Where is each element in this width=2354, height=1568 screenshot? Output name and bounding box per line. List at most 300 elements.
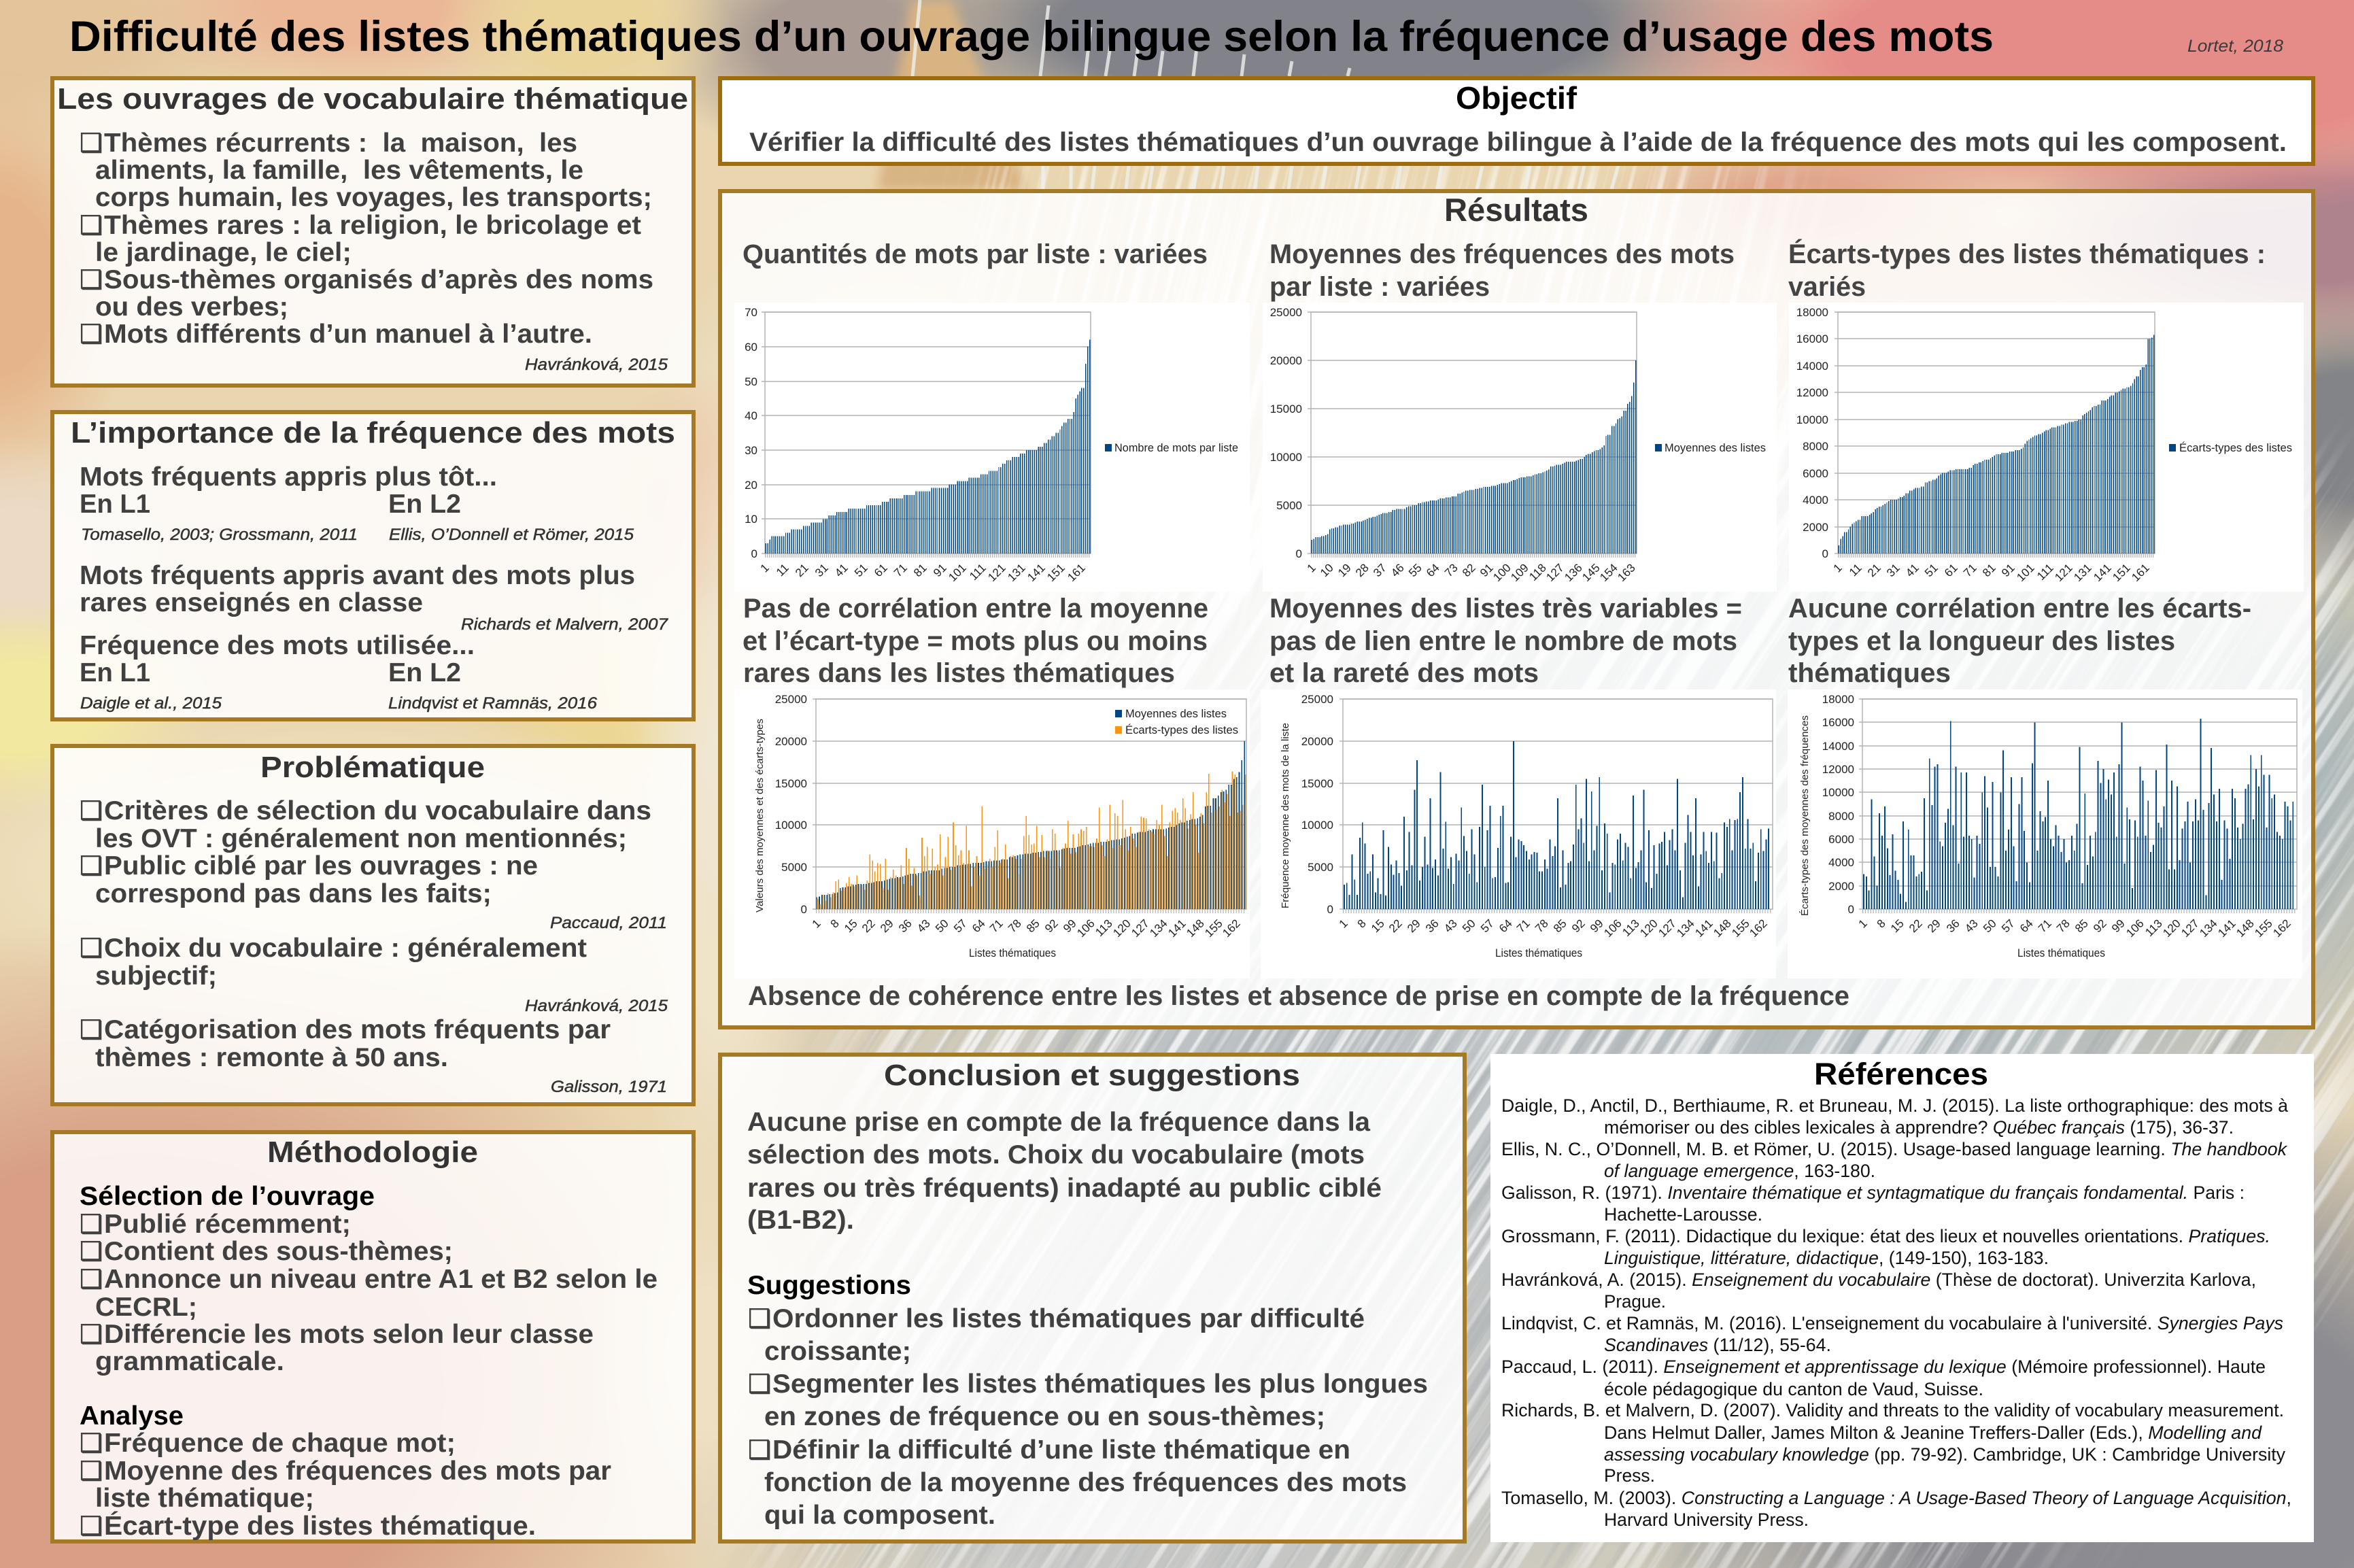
reference list: mémoriser ou des cibles lexicales à apprendre? Québec français (175), 36-37.: [1604, 1117, 2234, 1138]
bar chart: fréquence moyenne par liste: 43: [1442, 917, 1460, 935]
reference list: Harvard University Press.: [1604, 1510, 1809, 1530]
bar chart: écarts-types des moyennes: 8000: [1828, 810, 1854, 823]
bar chart: moyennes et écarts-types combinés: [734, 689, 1250, 978]
chart 3 heading: [1788, 239, 2266, 302]
legend: Moyennes des listes: [1125, 707, 1227, 720]
bar chart: écarts-types des moyennes: 50: [1981, 917, 1999, 935]
chart 6 heading: types et la longueur des listes: [1788, 626, 2175, 656]
text block: sélection de l'ouvrage: [80, 1182, 658, 1376]
bar chart: écarts-types des listes: 151: [2110, 561, 2133, 584]
bar chart: écarts-types des listes: 8000: [1803, 440, 1828, 453]
bar chart: moyennes des listes: 25000: [1270, 306, 1302, 319]
bar chart: moyennes des listes: 19: [1335, 561, 1354, 579]
text block: learned earlier: Tomasello, 2003; Grossmann, 2011: [81, 526, 358, 544]
bar chart: fréquence moyenne par liste: 64: [1497, 917, 1515, 935]
bar chart: écarts-types des moyennes: 8: [1875, 917, 1888, 931]
bullet list: Catégorisation des mots fréquents par: [104, 1015, 611, 1044]
title: Difficulté des listes thématiques d’un ouvrage bilingue selon la fréquence d’usage des mots: [69, 13, 1994, 61]
text block: learned before rarer words: rares enseignés en classe: [80, 588, 423, 617]
bar chart: écarts-types des moyennes: 14000: [1822, 740, 1854, 753]
bar chart: écarts-types des moyennes: 36: [1944, 917, 1962, 935]
bar chart: fréquence moyenne par liste: 15000: [1301, 777, 1333, 790]
bar chart: nombre de mots par liste: 0: [751, 547, 757, 560]
suggestions list: Définir la difficulté d’une liste thématique en: [772, 1435, 1350, 1465]
bar chart: écarts-types des moyennes: 4000: [1828, 856, 1854, 869]
bar chart: moyennes des listes: 82: [1460, 561, 1478, 579]
bar chart: moyennes des listes: 127: [1543, 561, 1567, 584]
text block: frequency used: En L2: [388, 658, 461, 687]
heading: Les ouvrages de vocabulaire thématique: [57, 82, 688, 116]
bar chart: moyennes des listes: 37: [1371, 561, 1389, 579]
bar chart: écarts-types des listes: [1789, 303, 2304, 592]
conclusion text: Aucune prise en compte de la fréquence dans la: [747, 1108, 1370, 1137]
bullet list: subjectif;: [95, 961, 217, 991]
bullet list: corps humain, les voyages, les transports;: [95, 183, 652, 212]
text block: analyse: Écart-type des listes thématique.: [104, 1511, 536, 1541]
text block: sélection de l'ouvrage: ❑: [80, 1319, 103, 1349]
legend: Écarts-types des listes: [2179, 441, 2292, 454]
chart 2 heading: [1269, 239, 1735, 302]
chart 6 heading: [1788, 594, 2251, 688]
text block: learned earlier: Ellis, O’Donnell et Römer, 2015: [389, 526, 634, 544]
suggestions list: ❑: [748, 1435, 771, 1465]
text block: learned earlier: Mots fréquents appris plus tôt...: [80, 462, 497, 492]
bar chart: moyennes des listes: 73: [1442, 561, 1461, 579]
bar chart: moyennes des listes: 10000: [1270, 451, 1302, 464]
bullet list: les OVT : généralement non mentionnés;: [95, 824, 627, 853]
bar chart: moyennes des listes: 55: [1406, 561, 1425, 579]
panel: Problématique: [52, 746, 694, 1104]
bar chart: écarts-types des moyennes: 71: [2036, 917, 2054, 935]
chart 4 heading: Pas de corrélation entre la moyenne: [743, 594, 1208, 624]
panel: Références: [1490, 1054, 2314, 1542]
bar chart: écarts-types des moyennes: [1788, 689, 2302, 978]
bar chart: moyennes et écarts-types combinés: 162: [1220, 917, 1243, 940]
suggestions list: qui la composent.: [764, 1501, 995, 1530]
text block: sélection de l'ouvrage: Sélection de l’ouvrage: [80, 1182, 375, 1211]
text block: frequency used: Lindqvist et Ramnäs, 2016: [388, 694, 597, 713]
bar chart: écarts-types des listes: 16000: [1796, 333, 1828, 345]
bar chart: écarts-types des moyennes: 15: [1888, 917, 1907, 935]
bullet list: Thèmes récurrents : la maison, les: [104, 129, 577, 158]
reference list: Daigle, D., Anctil, D., Berthiaume, R. et Bruneau, M. J. (2015). La liste orthographique: des mots à: [1501, 1095, 2288, 1116]
text block: frequency used: Daigle et al., 2015: [80, 694, 222, 713]
bar chart: écarts-types des moyennes: 155: [2252, 917, 2275, 940]
bar chart: écarts-types des moyennes: 92: [2091, 917, 2109, 935]
bullet list: Galisson, 1971: [551, 1078, 667, 1096]
bar chart: écarts-types des listes: 10000: [1796, 413, 1828, 426]
suggestions list: en zones de fréquence ou en sous-thèmes;: [764, 1402, 1325, 1431]
heading: Résultats: [1444, 192, 1588, 228]
reference list: Galisson, R. (1971). Inventaire thématique et syntagmatique du français fondamental. Paris :: [1501, 1182, 2245, 1203]
bar chart: nombre de mots par liste: 60: [745, 341, 757, 354]
chart 2 heading: par liste : variées: [1269, 272, 1490, 302]
text block: sélection de l'ouvrage: ❑: [80, 1264, 103, 1294]
y axis title: Fréquence moyenne des mots de la liste: [1280, 723, 1291, 908]
bullet list: ❑: [80, 1015, 103, 1044]
bar chart: moyennes et écarts-types combinés: 113: [1093, 917, 1115, 939]
bar chart: moyennes des listes: 15000: [1270, 403, 1302, 415]
chart 2 heading: Moyennes des fréquences des mots: [1269, 239, 1735, 269]
chart 6 heading: thématiques: [1788, 658, 1951, 688]
bar chart: écarts-types des listes: 81: [1980, 561, 1998, 579]
bar chart: écarts-types des listes: 6000: [1803, 467, 1828, 480]
text block: analyse: ❑: [80, 1511, 103, 1541]
bar chart: moyennes des listes: 28: [1353, 561, 1371, 579]
bar chart: moyennes et écarts-types combinés: 25000: [775, 693, 807, 706]
bar chart: écarts-types des listes: 2000: [1803, 521, 1828, 534]
bar chart: fréquence moyenne par liste: 92: [1569, 917, 1588, 935]
bar chart: fréquence moyenne par liste: 10000: [1301, 819, 1333, 832]
panel: Méthodologie: [52, 1132, 694, 1541]
bar chart: écarts-types des moyennes: 127: [2179, 917, 2202, 940]
bar chart: écarts-types des listes: 12000: [1796, 386, 1828, 399]
bar chart: moyennes et écarts-types combinés: 15000: [775, 777, 807, 790]
text block: learned earlier: En L2: [388, 490, 461, 519]
text block: sélection de l'ouvrage: ❑: [80, 1209, 103, 1239]
panel: Objectif: [720, 78, 2313, 164]
chart 5 heading: Moyennes des listes très variables =: [1269, 594, 1742, 624]
objective statement: Vérifier la difficulté des listes thématiques d’un ouvrage bilingue à l’aide de la fréquence des mots qui les composent.: [749, 128, 2287, 157]
legend: [1115, 707, 1238, 736]
suggestions list: Segmenter les listes thématiques les plus longues: [772, 1369, 1428, 1399]
bar chart: moyennes et écarts-types combinés: 20000: [775, 735, 807, 748]
author credit: Lortet, 2018: [2187, 37, 2283, 56]
bar chart: fréquence moyenne par liste: 162: [1747, 917, 1770, 940]
bar chart: écarts-types des moyennes: 29: [1925, 917, 1943, 935]
bar chart: moyennes et écarts-types combinés: 134: [1147, 917, 1170, 940]
bar chart: écarts-types des listes: 18000: [1796, 306, 1828, 319]
bar chart: écarts-types des moyennes: 6000: [1828, 833, 1854, 846]
text block: frequency used: [80, 631, 597, 713]
bar chart: moyennes et écarts-types combinés: 10000: [775, 819, 807, 832]
bullet list: ❑: [80, 796, 103, 825]
bar chart: écarts-types des listes: 111: [2034, 561, 2056, 583]
suggestions list: fonction de la moyenne des fréquences des mots: [764, 1468, 1407, 1497]
bar chart: moyennes et écarts-types combinés: 8: [828, 917, 842, 931]
bar chart: nombre de mots par liste: 50: [745, 375, 757, 388]
heading: Références: [1814, 1057, 1988, 1091]
bar chart: nombre de mots par liste: 71: [891, 561, 910, 579]
reference list: Grossmann, F. (2011). Didactique du lexique: état des lieux et nouvelles orientations. Pratiques.: [1501, 1226, 2270, 1246]
bar chart: nombre de mots par liste: 40: [745, 409, 757, 422]
bar chart: nombre de mots par liste: 151: [1044, 561, 1068, 584]
x axis title: Listes thématiques: [2017, 947, 2105, 959]
bar chart: fréquence moyenne par liste: 22: [1386, 917, 1405, 935]
heading: L’importance de la fréquence des mots: [71, 416, 675, 449]
text block: learned earlier: [80, 462, 634, 544]
text block: analyse: ❑: [80, 1456, 103, 1486]
bar chart: écarts-types des listes: 71: [1961, 561, 1979, 579]
heading: Objectif: [1456, 80, 1577, 116]
bar chart: nombre de mots par liste: 1: [758, 561, 772, 575]
bar chart: moyennes et écarts-types combinés: 155: [1202, 917, 1225, 940]
bar chart: écarts-types des listes: 14000: [1796, 360, 1828, 373]
bar chart: nombre de mots par liste: 20: [745, 479, 757, 492]
bar chart: moyennes des listes: 20000: [1270, 354, 1302, 367]
bar chart: moyennes et écarts-types combinés: 50: [933, 917, 951, 935]
bar chart: fréquence moyenne par liste: [1261, 689, 1776, 978]
bar chart: moyennes et écarts-types combinés: 1: [810, 917, 823, 931]
bar chart: moyennes des listes: 64: [1424, 561, 1442, 579]
bullet list: ❑: [80, 128, 103, 158]
bar chart: nombre de mots par liste: 91: [931, 561, 949, 579]
bullet list: [80, 796, 668, 1096]
bar chart: fréquence moyenne par liste: 148: [1711, 917, 1734, 940]
bar chart: nombre de mots par liste: 21: [793, 561, 811, 579]
suggestions list: ❑: [748, 1303, 771, 1333]
bar chart: écarts-types des moyennes: 113: [2143, 917, 2165, 939]
conclusion text: [747, 1108, 1382, 1235]
text block: sélection de l'ouvrage: Publié récemment;: [104, 1210, 351, 1239]
bar chart: écarts-types des listes: 21: [1865, 561, 1883, 579]
bar chart: fréquence moyenne par liste: 113: [1620, 917, 1642, 939]
bar chart: fréquence moyenne par liste: 78: [1533, 917, 1551, 935]
chart 5 heading: [1269, 594, 1742, 688]
bar chart: moyennes et écarts-types combinés: 36: [896, 917, 915, 935]
bar chart: nombre de mots par liste: 51: [852, 561, 870, 579]
bar chart: moyennes des listes: 136: [1562, 561, 1585, 584]
bar chart: moyennes des listes: 163: [1615, 561, 1638, 584]
reference list: Press.: [1604, 1465, 1655, 1486]
reference list: of language emergence, 163-180.: [1604, 1161, 1875, 1181]
text block: analyse: Analyse: [80, 1401, 184, 1431]
bar chart: moyennes des listes: 91: [1478, 561, 1496, 579]
reference list: Paccaud, L. (2011). Enseignement et apprentissage du lexique (Mémoire professionnel). Haute: [1501, 1357, 2266, 1377]
bar chart: moyennes et écarts-types combinés: 57: [951, 917, 970, 935]
text block: learned earlier: En L1: [80, 490, 150, 519]
suggestions list: ❑: [748, 1369, 771, 1399]
bar chart: moyennes des listes: 109: [1508, 561, 1531, 584]
bar chart: fréquence moyenne par liste: 1: [1337, 917, 1350, 931]
bar chart: écarts-types des listes: 41: [1903, 561, 1922, 579]
bar chart: moyennes des listes: 0: [1296, 547, 1302, 560]
reference list: Dans Helmut Daller, James Milton & Jeanine Treffers-Daller (Eds.), Modelling and: [1604, 1422, 2262, 1443]
bar chart: moyennes et écarts-types combinés: 0: [801, 903, 807, 916]
conclusion text: sélection des mots. Choix du vocabulaire (mots: [747, 1140, 1365, 1170]
bar chart: fréquence moyenne par liste: 57: [1478, 917, 1497, 935]
bullet list: le jardinage, le ciel;: [95, 238, 352, 267]
bar chart: écarts-types des listes: 51: [1922, 561, 1941, 579]
bar chart: moyennes des listes: 10: [1318, 561, 1336, 579]
bar chart: fréquence moyenne par liste: 20000: [1301, 735, 1333, 748]
chart 3 heading: Écarts-types des listes thématiques :: [1788, 239, 2266, 269]
heading: Méthodologie: [267, 1136, 478, 1169]
chart 4 heading: [743, 594, 1208, 688]
y axis title: Valeurs des moyennes et des écarts-types: [754, 719, 766, 913]
bar chart: moyennes des listes: [1263, 303, 1777, 592]
bullet list: ❑: [80, 265, 103, 294]
bar chart: écarts-types des moyennes: 64: [2017, 917, 2036, 935]
bar chart: écarts-types des listes: 121: [2052, 561, 2075, 584]
bar chart: fréquence moyenne par liste: 71: [1514, 917, 1533, 935]
conclusion text: rares ou très fréquents) inadapté au public ciblé: [747, 1174, 1382, 1203]
bar chart: moyennes et écarts-types combinés: 29: [878, 917, 896, 935]
reference list: Scandinaves (11/12), 55-64.: [1604, 1335, 1831, 1355]
heading: Problématique: [260, 751, 485, 784]
bar chart: écarts-types des listes: 91: [1999, 561, 2017, 579]
bar chart: écarts-types des moyennes: 120: [2160, 917, 2183, 940]
reference list: Prague.: [1604, 1291, 1666, 1312]
bar chart: moyennes et écarts-types combinés: 43: [915, 917, 933, 935]
chart 4 heading: rares dans les listes thématiques: [743, 658, 1175, 688]
reference list: Richards, B. et Malvern, D. (2007). Validity and threats to the validity of vocabulary measurement.: [1501, 1400, 2284, 1420]
bar chart: moyennes et écarts-types combinés: 71: [987, 917, 1006, 935]
bar chart: écarts-types des listes: 61: [1942, 561, 1960, 579]
text block: sélection de l'ouvrage: Annonce un niveau entre A1 et B2 selon le: [104, 1265, 658, 1294]
bar chart: fréquence moyenne par liste: 15: [1369, 917, 1387, 935]
bar chart: écarts-types des listes: 101: [2014, 561, 2037, 584]
bullet list: ❑: [80, 933, 103, 963]
bar chart: moyennes et écarts-types combinés: 78: [1006, 917, 1024, 935]
bar chart: nombre de mots par liste: 31: [813, 561, 831, 579]
bar chart: moyennes et écarts-types combinés: 99: [1061, 917, 1079, 935]
bar chart: nombre de mots par liste: [734, 303, 1250, 592]
bar chart: moyennes et écarts-types combinés: 64: [970, 917, 988, 935]
bar chart: écarts-types des moyennes: 22: [1907, 917, 1925, 935]
bar chart: écarts-types des moyennes: 16000: [1822, 716, 1854, 729]
text block: frequency used: En L1: [80, 658, 150, 687]
bullet list: ❑: [80, 851, 103, 881]
bar chart: écarts-types des moyennes: 10000: [1822, 786, 1854, 799]
chart 5 heading: et la rareté des mots: [1269, 658, 1539, 688]
bar chart: écarts-types des listes: 1: [1831, 561, 1845, 575]
bar chart: écarts-types des listes: 11: [1847, 561, 1864, 579]
bar chart: écarts-types des listes: 0: [1822, 547, 1828, 560]
bar chart: écarts-types des listes: 4000: [1803, 494, 1828, 507]
bullet list: correspond pas dans les faits;: [95, 879, 492, 908]
bar chart: écarts-types des moyennes: 99: [2109, 917, 2128, 935]
bar chart: moyennes et écarts-types combinés: 141: [1165, 917, 1189, 940]
bar chart: nombre de mots par liste: 131: [1005, 561, 1028, 584]
bar chart: moyennes des listes: 1: [1305, 561, 1318, 575]
text block: analyse: Moyenne des fréquences des mots par: [104, 1456, 611, 1486]
bullet list: Mots différents d’un manuel à l’autre.: [104, 320, 592, 349]
bar chart: nombre de mots par liste: 141: [1025, 561, 1048, 584]
suggestions list: [747, 1271, 1428, 1530]
bar chart: nombre de mots par liste: 111: [967, 561, 989, 583]
x axis title: Listes thématiques: [969, 947, 1056, 959]
bar chart: moyennes et écarts-types combinés: 22: [859, 917, 878, 935]
bullet list: ou des verbes;: [95, 292, 288, 322]
bar chart: écarts-types des moyennes: 106: [2123, 917, 2147, 940]
bar chart: fréquence moyenne par liste: 36: [1423, 917, 1442, 935]
bar chart: fréquence moyenne par liste: 85: [1551, 917, 1569, 935]
bar chart: écarts-types des moyennes: 162: [2270, 917, 2293, 940]
bullet list: thèmes : remonte à 50 ans.: [95, 1043, 448, 1072]
legend: Moyennes des listes: [1665, 441, 1766, 454]
bar chart: moyennes des listes: 118: [1526, 561, 1549, 583]
bar chart: fréquence moyenne par liste: 141: [1692, 917, 1716, 940]
text block: analyse: ❑: [80, 1428, 103, 1458]
suggestions list: croissante;: [764, 1337, 911, 1366]
bar chart: fréquence moyenne par liste: 155: [1729, 917, 1752, 940]
results summary: Absence de cohérence entre les listes et absence de prise en compte de la fréquence: [748, 981, 1849, 1011]
reference list: Tomasello, M. (2003). Constructing a Language : A Usage-Based Theory of Language Acquisition ,: [1501, 1488, 2291, 1508]
bar chart: nombre de mots par liste: 101: [946, 561, 969, 584]
text block: frequency used: Fréquence des mots utilisée...: [80, 631, 475, 660]
text block: sélection de l'ouvrage: Différencie les mots selon leur classe: [104, 1320, 594, 1349]
legend: Nombre de mots par liste: [1114, 441, 1238, 454]
bullet list: Paccaud, 2011: [550, 914, 667, 932]
bar chart: moyennes et écarts-types combinés: 5000: [781, 861, 807, 874]
bullet list: aliments, la famille, les vêtements, le: [95, 156, 583, 185]
bar chart: moyennes des listes: 154: [1597, 561, 1620, 584]
bar chart: fréquence moyenne par liste: 106: [1601, 917, 1624, 940]
reference list: [1501, 1095, 2291, 1530]
bar chart: moyennes des listes: 100: [1490, 561, 1514, 584]
text block: learned before rarer words: [80, 561, 668, 634]
chart 5 heading: pas de lien entre le nombre de mots: [1269, 626, 1737, 656]
text block: analyse: [80, 1401, 611, 1541]
bar chart: écarts-types des listes: 161: [2129, 561, 2152, 584]
text block: sélection de l'ouvrage: Contient des sous-thèmes;: [104, 1237, 453, 1266]
text block: sélection de l'ouvrage: grammaticale.: [95, 1347, 284, 1376]
bar chart: fréquence moyenne par liste: 8: [1355, 917, 1369, 931]
bar chart: nombre de mots par liste: 41: [832, 561, 851, 579]
bar chart: nombre de mots par liste: 161: [1065, 561, 1088, 584]
bar chart: écarts-types des moyennes: 1: [1856, 917, 1870, 931]
bar chart: moyennes des listes: 145: [1580, 561, 1603, 584]
reference list: Linguistique, littérature, didactique, (149-150), 163-183.: [1604, 1248, 2049, 1268]
bar chart: moyennes et écarts-types combinés: 106: [1074, 917, 1097, 940]
bar chart: écarts-types des moyennes: 134: [2197, 917, 2220, 940]
reference list: Hachette-Larousse.: [1604, 1204, 1762, 1225]
bar chart: fréquence moyenne par liste: 50: [1460, 917, 1478, 935]
bar chart: écarts-types des moyennes: 141: [2215, 917, 2238, 940]
suggestions list: Ordonner les listes thématiques par difficulté: [772, 1304, 1365, 1333]
bar chart: écarts-types des moyennes: 18000: [1822, 693, 1854, 706]
citation: Havránková, 2015: [525, 356, 668, 374]
bar chart: fréquence moyenne par liste: 127: [1656, 917, 1679, 940]
bar chart: moyennes et écarts-types combinés: 92: [1042, 917, 1061, 935]
reference list: école pédagogique du canton de Vaud, Suisse.: [1604, 1379, 1983, 1399]
text block: analyse: liste thématique;: [95, 1484, 314, 1513]
bullet list: Thèmes rares : la religion, le bricolage et: [104, 211, 641, 240]
bar chart: moyennes et écarts-types combinés: 148: [1184, 917, 1207, 940]
chart 3 heading: variés: [1788, 272, 1866, 302]
bar chart: écarts-types des moyennes: 2000: [1828, 880, 1854, 893]
text block: sélection de l'ouvrage: ❑: [80, 1236, 103, 1266]
bar chart: écarts-types des moyennes: 57: [1999, 917, 2017, 935]
bullet list: Choix du vocabulaire : généralement: [104, 934, 587, 963]
bar chart: moyennes et écarts-types combinés: 85: [1024, 917, 1042, 935]
suggestions list: Suggestions: [747, 1271, 911, 1300]
text block: learned before rarer words: Richards et Malvern, 2007: [461, 615, 668, 634]
bar chart: fréquence moyenne par liste: 25000: [1301, 693, 1333, 706]
chart 6 heading: Aucune corrélation entre les écarts-: [1788, 594, 2251, 624]
bar chart: écarts-types des moyennes: 0: [1848, 903, 1854, 916]
panel: Résultats: [720, 191, 2313, 1027]
conclusion text: (B1-B2).: [747, 1206, 854, 1235]
heading: Conclusion et suggestions: [884, 1059, 1300, 1092]
bar chart: écarts-types des moyennes: 78: [2054, 917, 2072, 935]
bar chart: fréquence moyenne par liste: 0: [1327, 903, 1333, 916]
x axis title: Listes thématiques: [1495, 947, 1582, 959]
bar chart: écarts-types des listes: 31: [1884, 561, 1903, 579]
bar chart: nombre de mots par liste: 81: [911, 561, 929, 579]
reference list: Havránková, A. (2015). Enseignement du vocabulaire (Thèse de doctorat). Univerzita Karlova,: [1501, 1269, 2256, 1290]
bar chart: moyennes et écarts-types combinés: 15: [842, 917, 860, 935]
bar chart: nombre de mots par liste: 70: [745, 306, 757, 319]
reference list: Ellis, N. C., O’Donnell, M. B. et Römer, U. (2015). Usage-based language learning. The handbook: [1501, 1139, 2288, 1159]
bullet list: Public ciblé par les ouvrages : ne: [104, 851, 538, 881]
bar chart: moyennes des listes: 5000: [1276, 499, 1302, 512]
panel: Conclusion et suggestions: [720, 1055, 1465, 1541]
bar chart: écarts-types des moyennes: 43: [1962, 917, 1981, 935]
bullet list: Critères de sélection du vocabulaire dans: [104, 796, 651, 825]
bullet list: Sous-thèmes organisés d’après des noms: [104, 265, 653, 294]
